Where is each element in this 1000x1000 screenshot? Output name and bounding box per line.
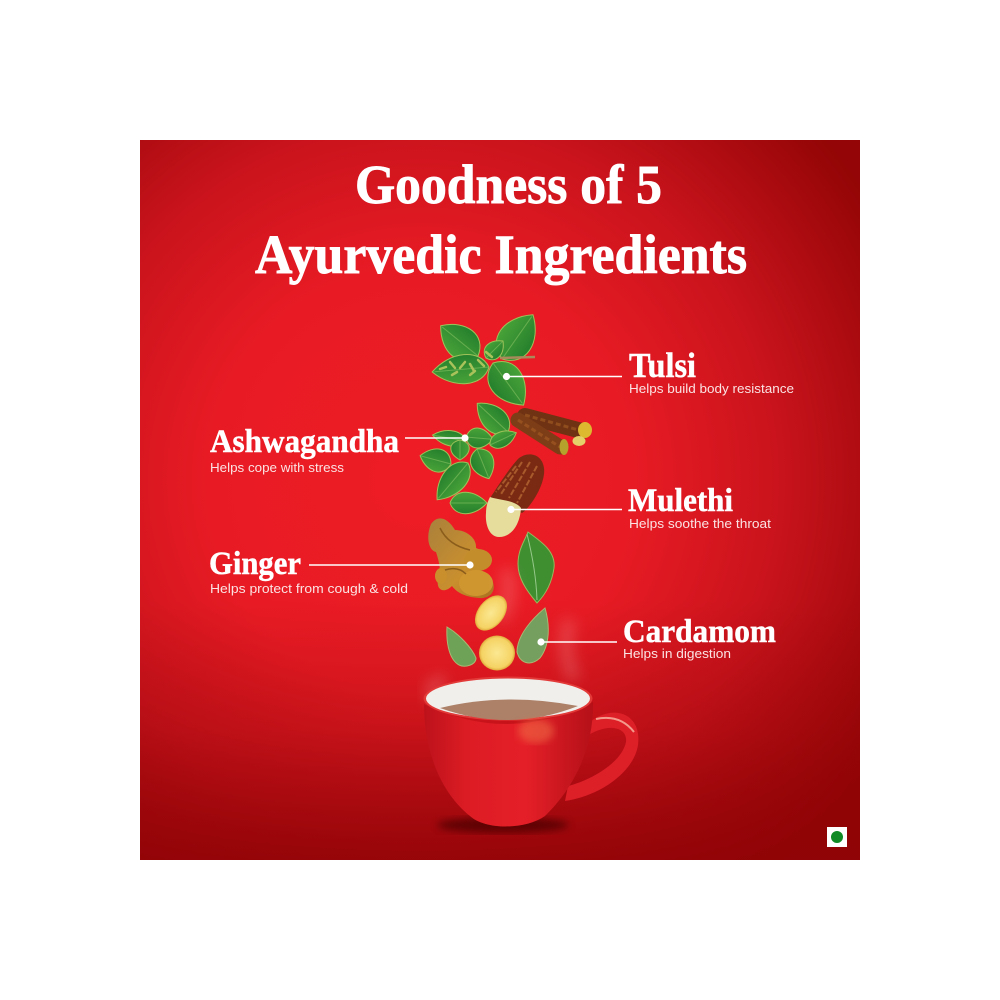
icon: red tea cup <box>424 676 638 833</box>
icon: tulsi leaves <box>431 305 547 415</box>
callout: Cardamom <box>537 614 776 661</box>
icon: vegetarian mark <box>827 827 847 847</box>
icon: mulethi root <box>486 454 544 537</box>
callout: Ginger: Ginger <box>209 546 301 582</box>
icon: cardamom pods <box>447 608 548 666</box>
callout: Ashwagandha: Ashwagandha <box>210 424 399 460</box>
callout: Tulsi <box>503 346 794 396</box>
callout: Cardamom: Cardamom <box>623 614 776 650</box>
callout: Cardamom: Helps in digestion <box>623 646 731 661</box>
icon: ginger root <box>428 518 494 598</box>
icon: bay leaf <box>518 532 554 603</box>
callout: Mulethi: Helps soothe the throat <box>629 516 771 531</box>
callout: Tulsi: Helps build body resistance <box>629 381 794 396</box>
steam <box>432 570 575 700</box>
icon: ginger slices <box>468 589 515 670</box>
title: Ayurvedic Ingredients <box>255 224 747 285</box>
icon: licorice sticks <box>518 415 592 455</box>
callout: Ginger: Helps protect from cough & cold <box>210 581 408 596</box>
callout: Mulethi <box>507 483 771 531</box>
callout: Ashwagandha <box>210 424 469 475</box>
title <box>255 154 747 285</box>
callout: Mulethi: Mulethi <box>628 483 733 519</box>
icon: ashwagandha leaves <box>417 394 520 514</box>
title: Goodness of 5 <box>355 154 662 215</box>
callout: Ginger <box>209 546 474 596</box>
red background panel <box>140 140 860 860</box>
callout: Ashwagandha: Helps cope with stress <box>210 460 345 475</box>
callout: Tulsi: Tulsi <box>629 346 696 385</box>
